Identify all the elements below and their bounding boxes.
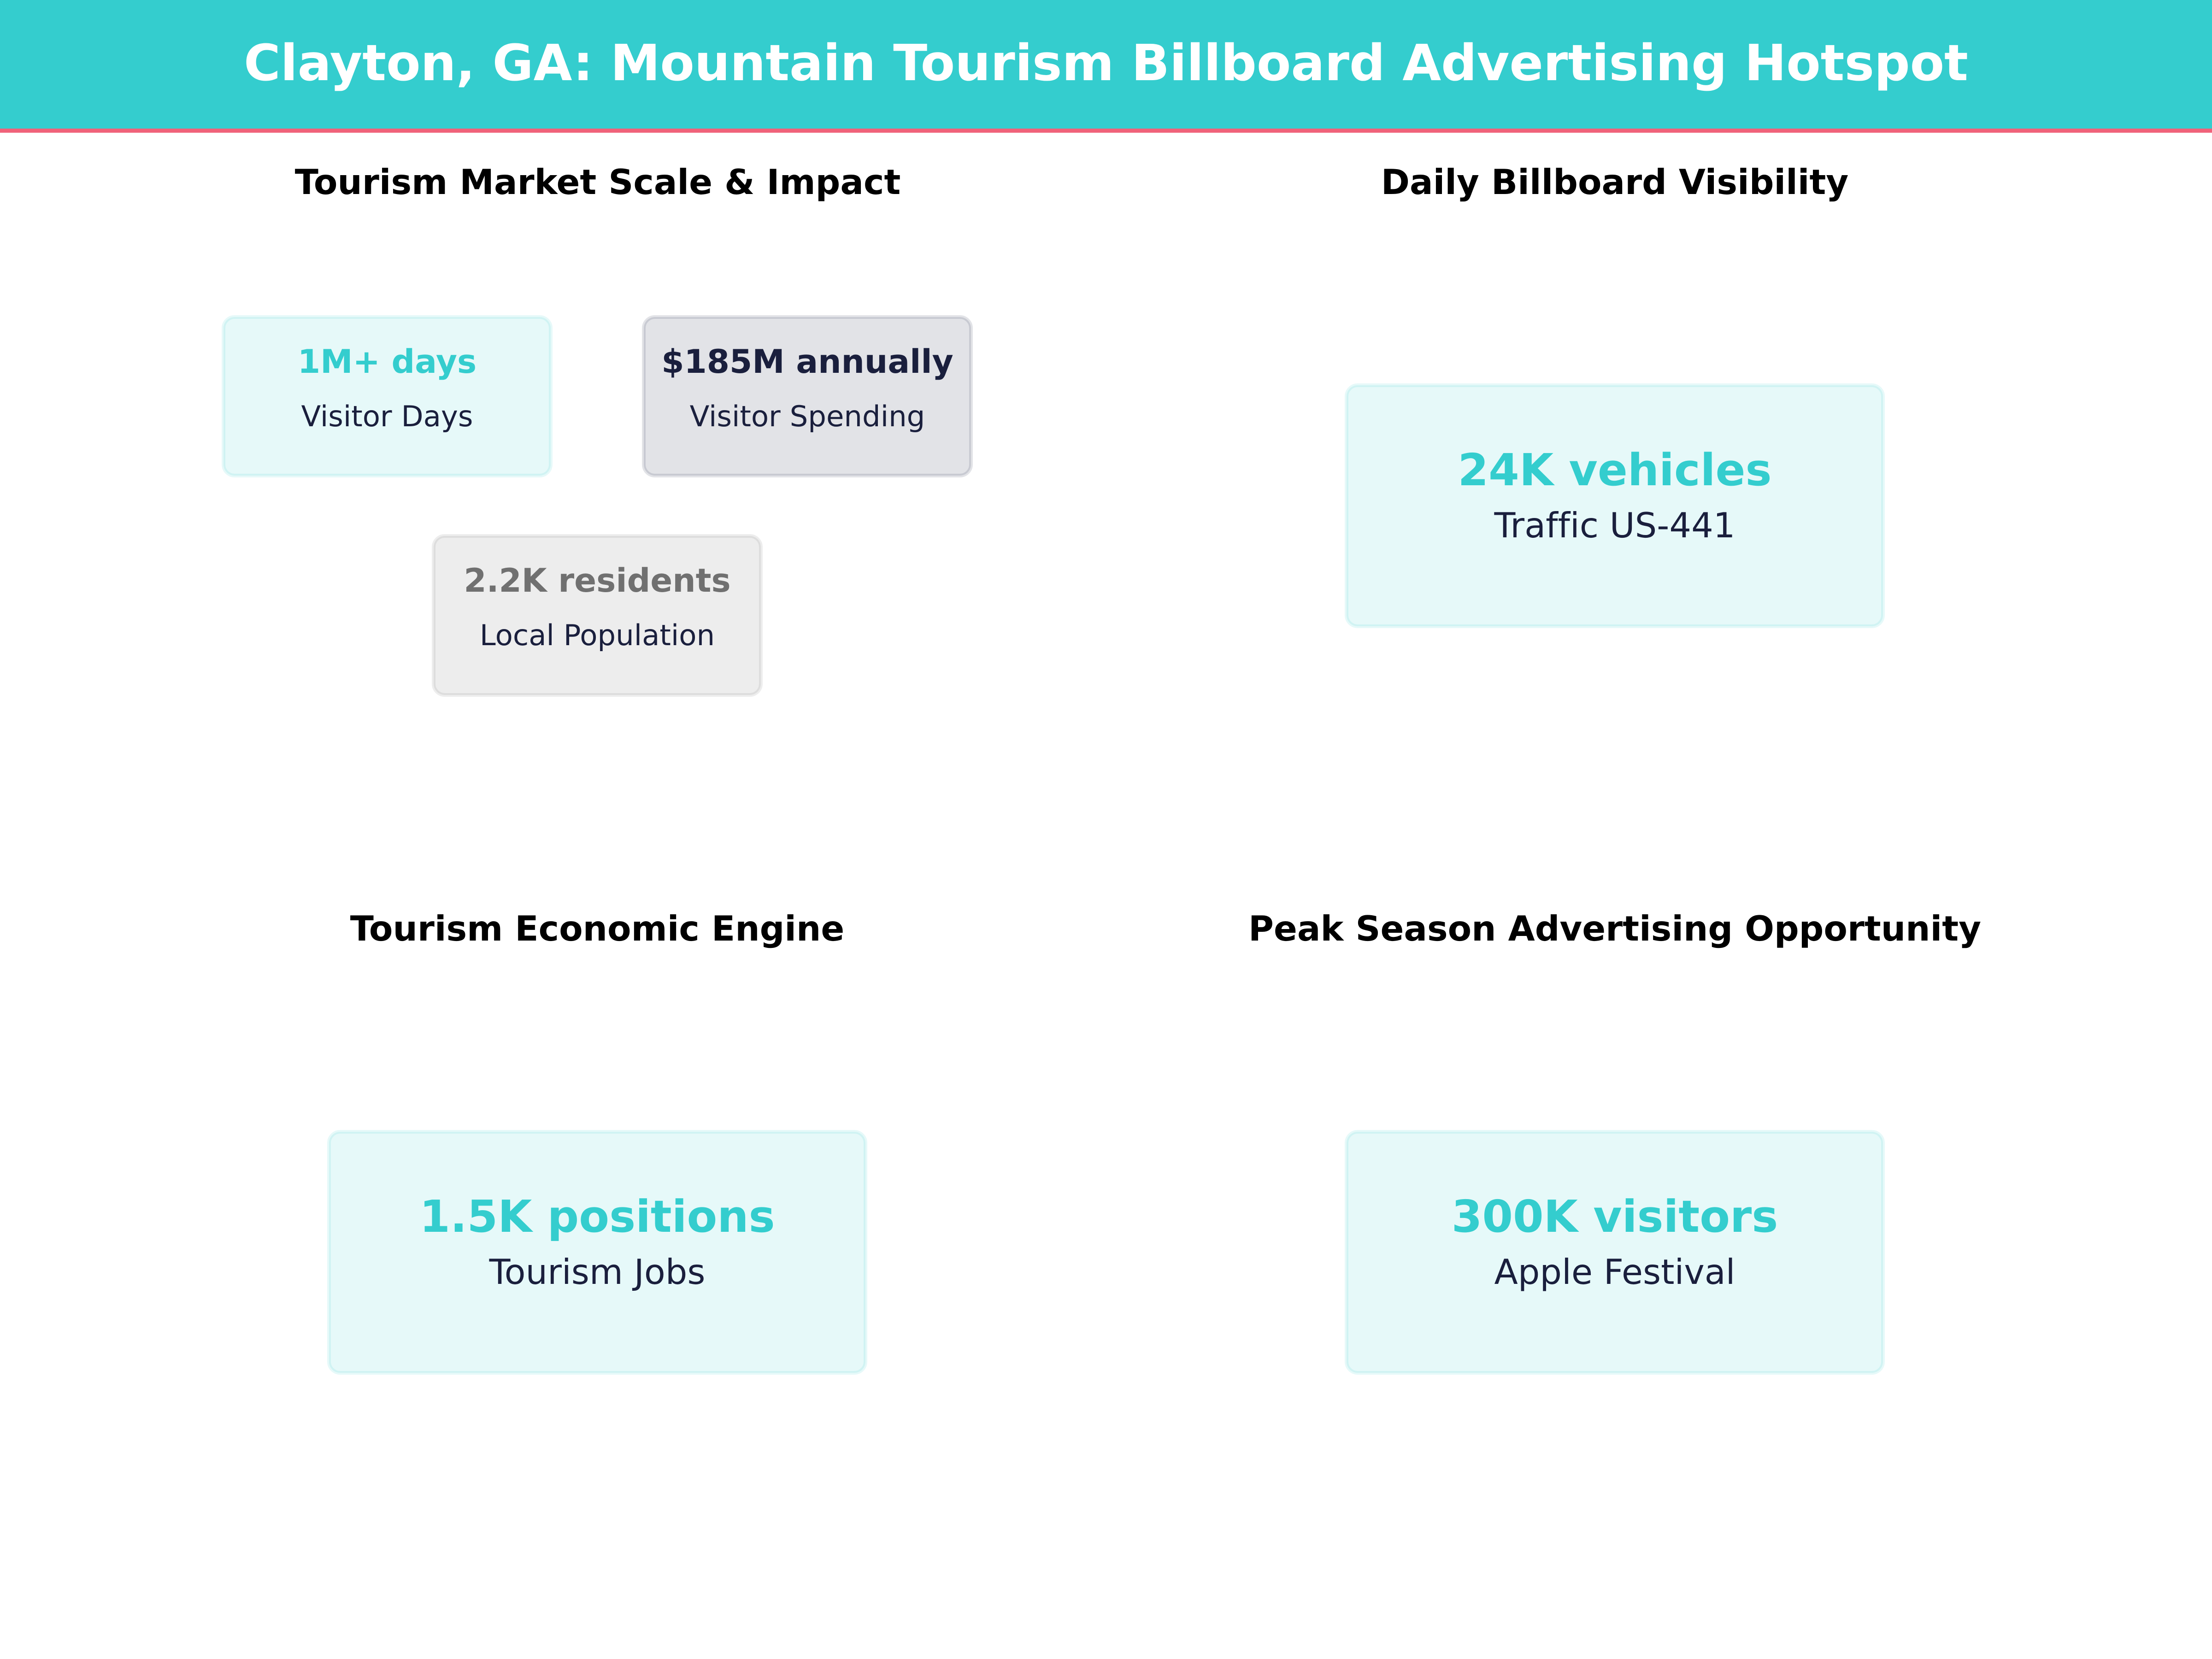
value: visitor spending: $185M annually bbox=[661, 342, 953, 381]
card background bbox=[1347, 1132, 1883, 1373]
heading: daily billboard visibility: Daily Billboard Visibility bbox=[1381, 162, 1848, 202]
panel: tourism economic engine bbox=[329, 908, 865, 1373]
card background bbox=[1347, 385, 1883, 626]
panel: peak season advertising opportunity bbox=[1248, 908, 1981, 1373]
heading: peak season advertising opportunity: Peak Season Advertising Opportunity bbox=[1248, 908, 1981, 949]
header background bbox=[0, 0, 2212, 129]
card background bbox=[224, 317, 551, 476]
title: Clayton, GA: Mountain Tourism Billboard Advertising Hotspot bbox=[244, 34, 1968, 92]
value: apple festival: 300K visitors bbox=[1452, 1191, 1778, 1242]
label: traffic: Traffic US-441 bbox=[1494, 505, 1735, 546]
label: visitor spending: Visitor Spending bbox=[690, 400, 925, 433]
heading: tourism market scale: Tourism Market Scale & Impact bbox=[295, 162, 900, 202]
value: tourism jobs: 1.5K positions bbox=[419, 1191, 775, 1242]
card: local population bbox=[434, 536, 761, 695]
card: visitor days bbox=[224, 317, 551, 476]
header banner bbox=[0, 0, 2212, 133]
label: visitor days: Visitor Days bbox=[301, 400, 473, 433]
card: visitor spending bbox=[644, 317, 971, 476]
value: visitor days: 1M+ days bbox=[298, 342, 477, 381]
card background bbox=[644, 317, 971, 476]
card: apple festival bbox=[1347, 1132, 1883, 1373]
panel: tourism market scale and impact bbox=[224, 162, 971, 695]
heading: tourism economic engine: Tourism Economic Engine bbox=[350, 908, 844, 949]
value: local population: 2.2K residents bbox=[464, 561, 731, 600]
card background bbox=[329, 1132, 865, 1373]
card background bbox=[434, 536, 761, 695]
header accent line bbox=[0, 129, 2212, 133]
label: apple festival: Apple Festival bbox=[1494, 1252, 1735, 1292]
value: traffic: 24K vehicles bbox=[1458, 444, 1771, 496]
label: local population: Local Population bbox=[480, 618, 715, 652]
panel: daily billboard visibility bbox=[1347, 162, 1883, 626]
label: tourism jobs: Tourism Jobs bbox=[489, 1252, 705, 1292]
card: traffic bbox=[1347, 385, 1883, 626]
card: tourism jobs bbox=[329, 1132, 865, 1373]
